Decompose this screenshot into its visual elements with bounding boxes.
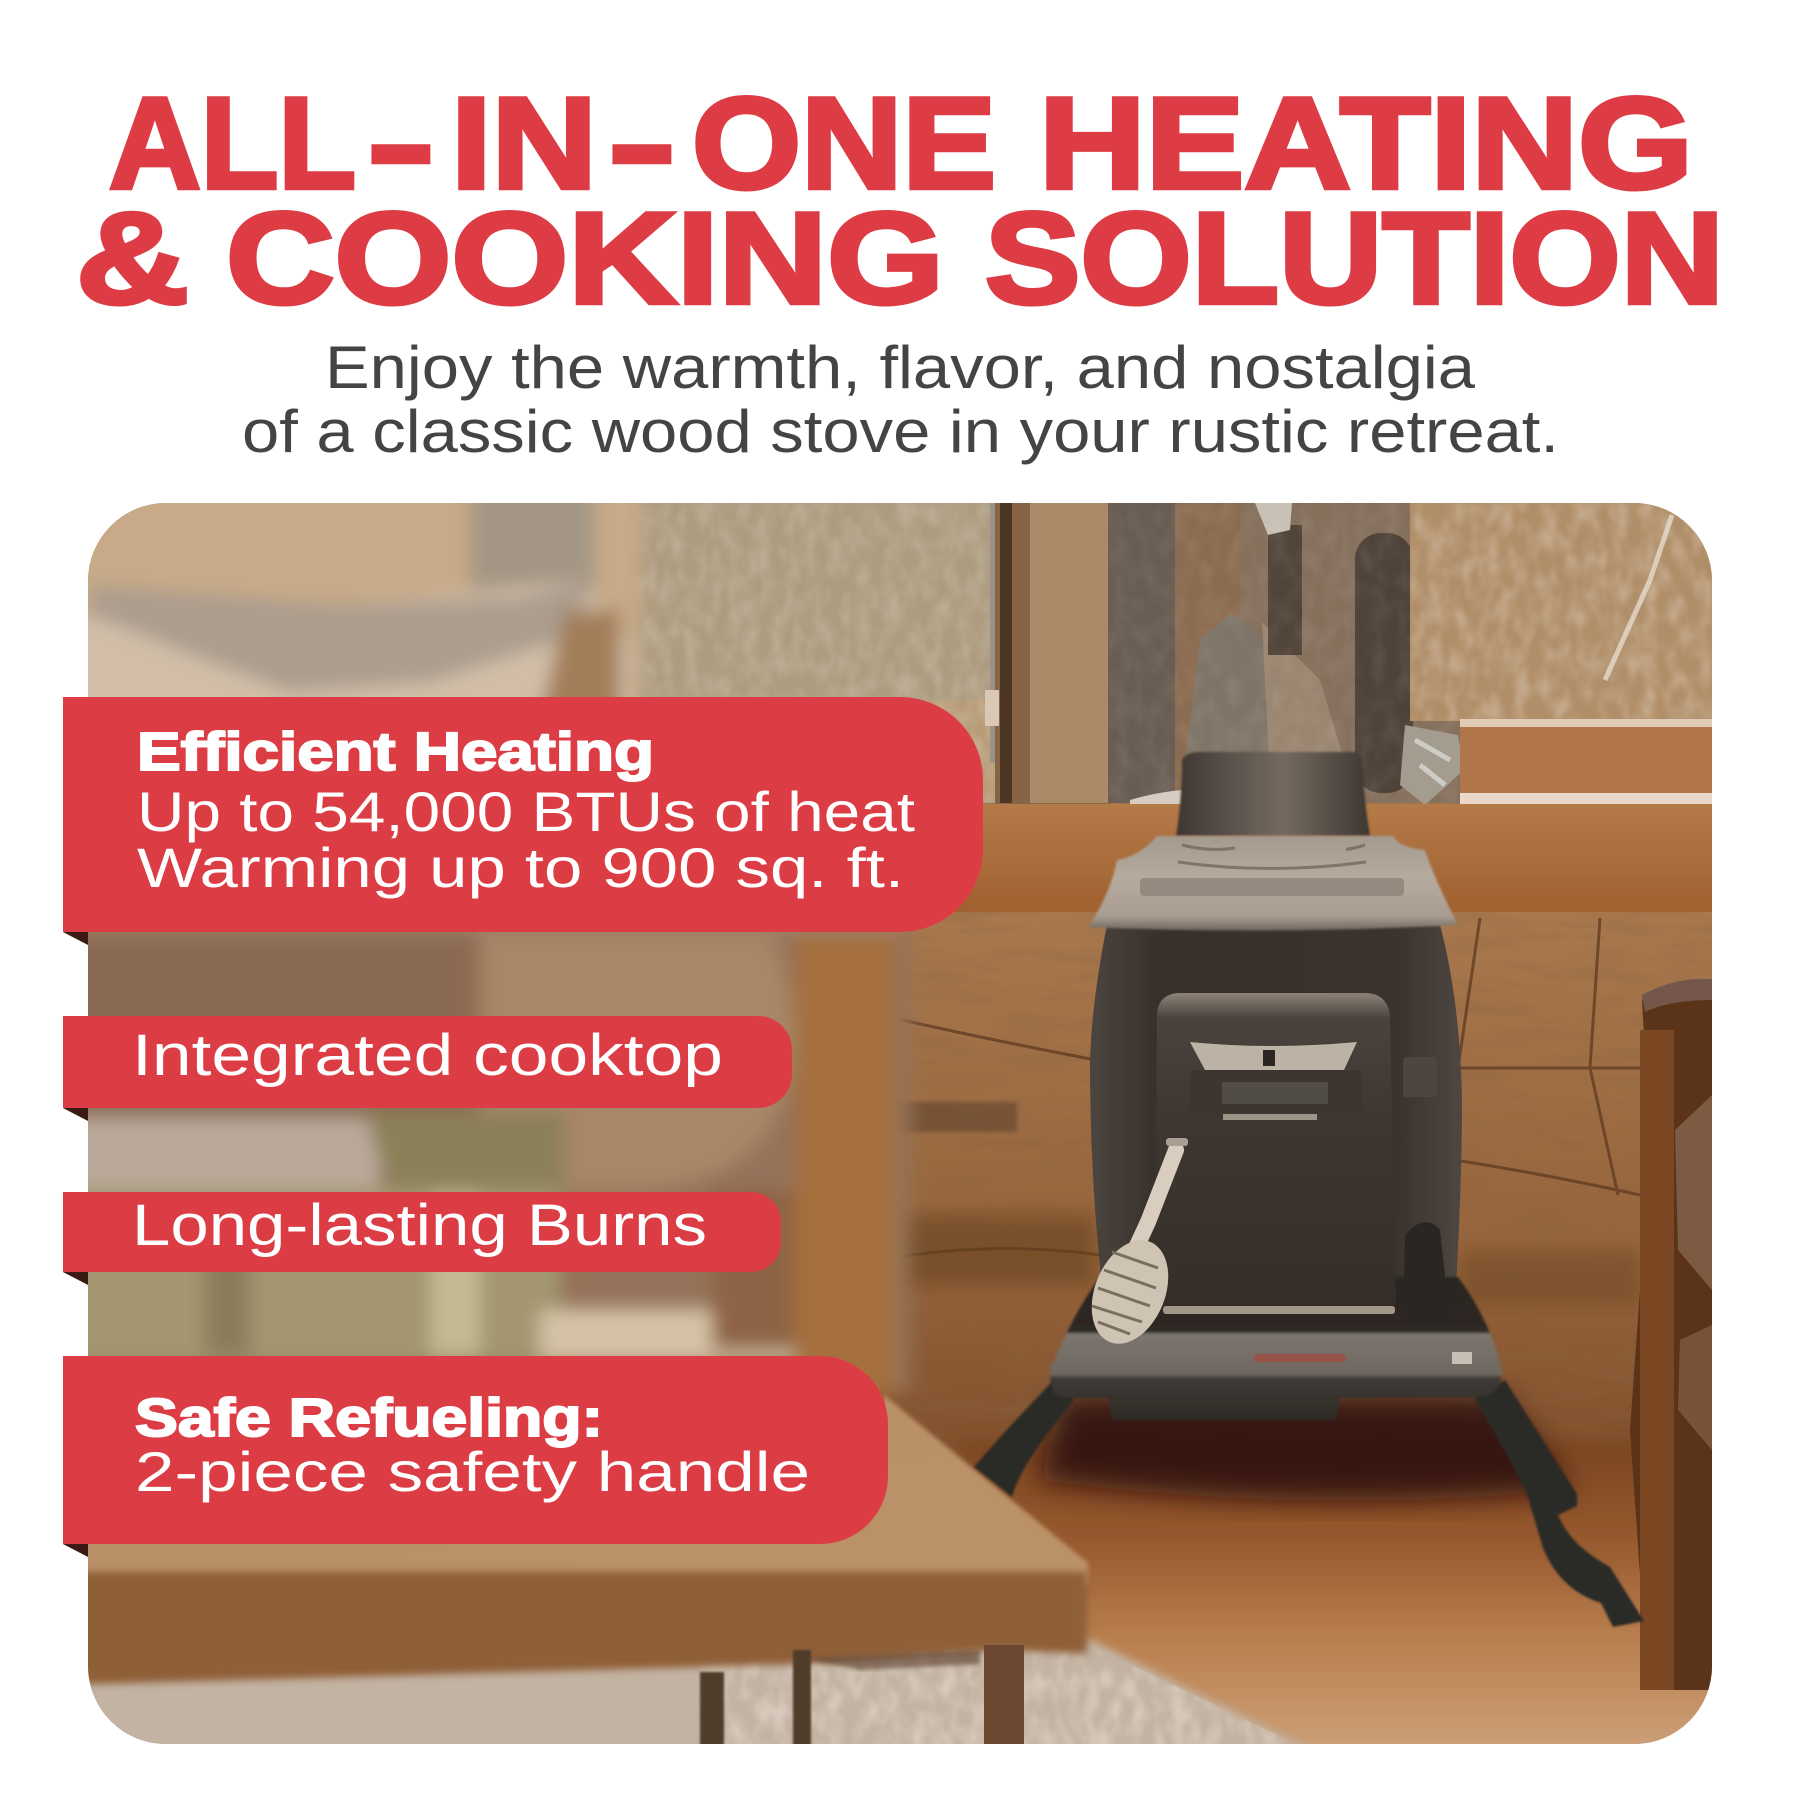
- stove body: [1090, 925, 1462, 1285]
- background: window and curtains: [600, 503, 1712, 813]
- title: SOLUTION: [985, 185, 1724, 331]
- stove right leg: [1474, 1380, 1644, 1627]
- title: [76, 70, 1724, 331]
- stove left leg: [974, 1378, 1074, 1497]
- subtitle: Enjoy the warmth, flavor, and nostalgia: [325, 334, 1476, 401]
- stove badge: [1254, 1354, 1346, 1362]
- ribbon: long-lasting burns: Long-lasting Burns: [132, 1193, 707, 1258]
- ribbon: efficient heating: Warming up to 900 sq. ft.: [137, 836, 904, 899]
- title: &: [76, 185, 189, 331]
- background: blurred sofa, cushions and plants: [60, 480, 910, 1395]
- subtitle: of a classic wood stove in your rustic retreat.: [242, 398, 1559, 465]
- background: rug under table: [88, 1636, 1306, 1744]
- title: HEATING: [1039, 70, 1693, 216]
- poker handle with spring grip: [1077, 1138, 1188, 1355]
- title: -: [367, 70, 435, 216]
- ribbon: integrated cooktop: [63, 1016, 792, 1121]
- ribbon: long-lasting burns: [63, 1192, 781, 1285]
- title: IN: [451, 70, 597, 216]
- title: -: [608, 70, 676, 216]
- photo panel: rustic room background: [60, 480, 1760, 1770]
- subtitle: [242, 334, 1559, 465]
- stove top burner ridges: [1140, 845, 1404, 896]
- stove base plate: [1050, 1277, 1502, 1420]
- stove hinge hardware: [1403, 1057, 1450, 1322]
- ribbon: safe refueling: [63, 1356, 888, 1557]
- stove base label: [1452, 1352, 1472, 1364]
- background: ledge and log wall: [880, 804, 1712, 1522]
- background: floor: [962, 1440, 1712, 1744]
- title: COOKING: [226, 185, 944, 331]
- title: ONE: [692, 70, 996, 216]
- chair at right: [1630, 979, 1712, 1690]
- background: dark shadow under stove: [1040, 1395, 1570, 1500]
- stove flue: [1176, 752, 1370, 836]
- ribbon: safe refueling: 2-piece safety handle: [135, 1440, 810, 1503]
- ribbon: efficient heating: [63, 697, 983, 945]
- title: ALL: [109, 70, 356, 216]
- stove ash rail: [1163, 1306, 1395, 1314]
- stove top plate: [1088, 836, 1458, 931]
- ribbon: efficient heating: Efficient Heating: [137, 722, 654, 782]
- stove door latch: [1190, 1042, 1362, 1120]
- stove door: [1155, 993, 1396, 1308]
- wood stove: [974, 752, 1644, 1627]
- ribbon: integrated cooktop: Integrated cooktop: [132, 1023, 723, 1088]
- ribbon: efficient heating: Up to 54,000 BTUs of heat: [137, 780, 916, 843]
- table: [60, 1395, 1088, 1752]
- ribbon: safe refueling: Safe Refueling:: [135, 1388, 603, 1448]
